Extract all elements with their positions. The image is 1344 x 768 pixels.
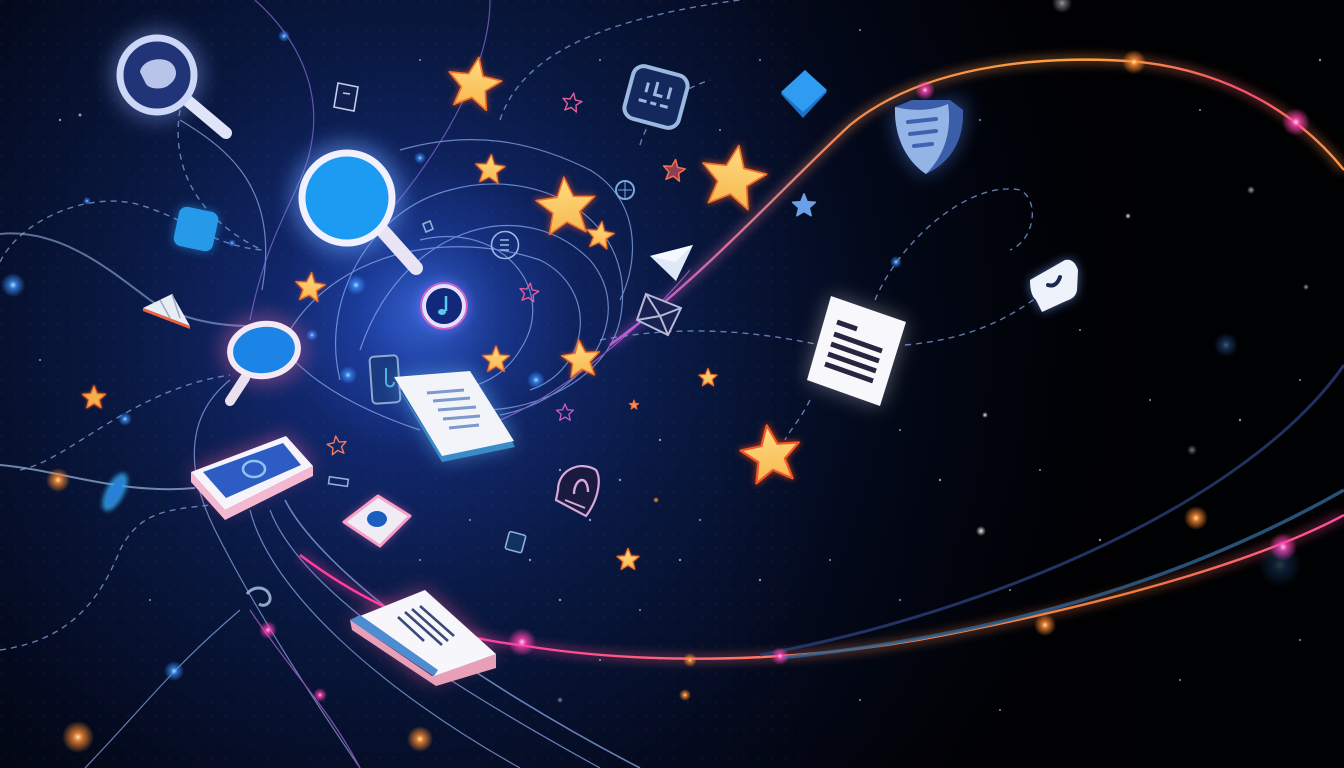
icon: small document outline xyxy=(334,83,358,111)
star xyxy=(444,53,505,112)
icon: top blue cube xyxy=(781,70,827,118)
icon: list disc xyxy=(492,232,518,258)
arc: top orange swoosh xyxy=(610,60,1344,345)
icon: small ring xyxy=(616,181,634,199)
flow lines: dashed paths xyxy=(0,0,1040,650)
icon: left blue tile xyxy=(172,205,220,253)
star xyxy=(617,548,639,569)
icon: paper plane left xyxy=(143,294,190,329)
stars: filled gold xyxy=(83,53,804,569)
icon: top-left magnifying glass xyxy=(111,29,226,133)
star xyxy=(629,400,639,409)
star xyxy=(696,140,771,212)
icon: phone xyxy=(369,355,401,404)
stars: small outlined xyxy=(326,92,815,455)
icon: pink badge xyxy=(556,466,599,516)
icon: paper plane right xyxy=(650,245,693,281)
arc: lower swooshes xyxy=(300,365,1344,659)
icon: stacked blue book xyxy=(191,436,313,520)
icon: rounded app badge xyxy=(622,64,690,130)
icon: small left magnifying glass xyxy=(222,316,306,401)
icon: white diamond tile xyxy=(344,496,410,546)
icon: small blue tag xyxy=(97,469,133,515)
icon: small card glyphs xyxy=(247,221,526,605)
icon: large magnifying glass xyxy=(291,142,416,268)
star xyxy=(294,271,326,302)
icon: open book bottom xyxy=(350,590,496,686)
star xyxy=(83,386,105,408)
star xyxy=(560,338,602,378)
icon: document centre xyxy=(394,371,515,462)
icon: shield xyxy=(895,98,963,174)
star xyxy=(534,175,597,235)
star xyxy=(699,368,717,386)
icon: chat bubble xyxy=(1030,260,1078,312)
star xyxy=(738,421,804,485)
icon: document right xyxy=(807,296,906,406)
star xyxy=(585,220,616,250)
icon: envelope frame xyxy=(637,294,681,335)
star xyxy=(483,346,509,371)
flow lines: thin network curves xyxy=(0,0,690,768)
star xyxy=(474,153,506,184)
icon: music note disc xyxy=(418,280,470,332)
